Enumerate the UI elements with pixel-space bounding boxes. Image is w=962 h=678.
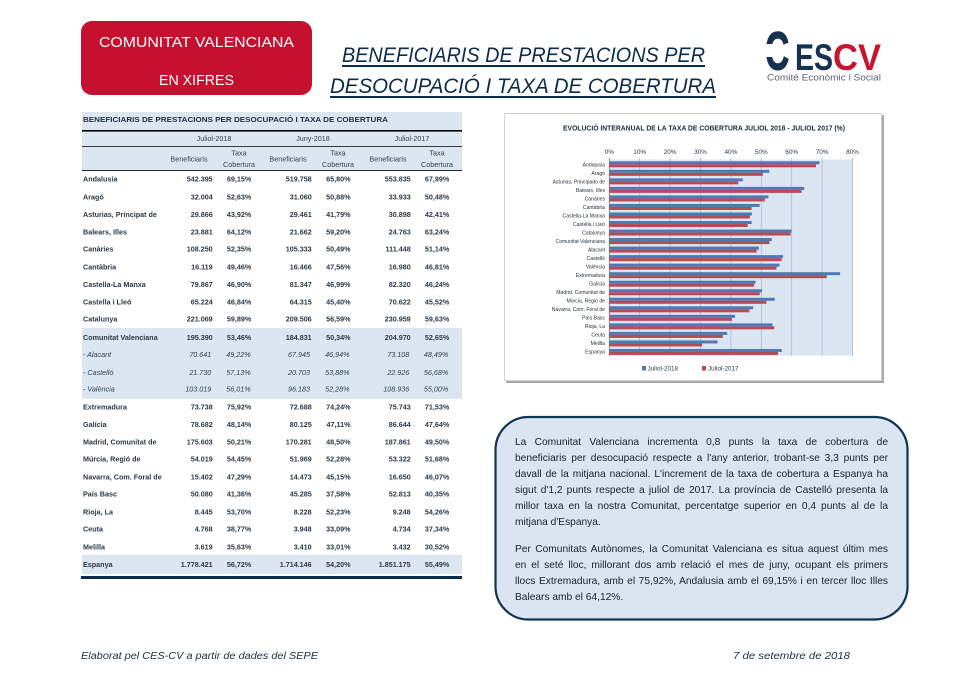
table rows: 170.281 bbox=[286, 438, 312, 447]
table rows: 1.851.175 bbox=[379, 560, 411, 569]
callout text bbox=[515, 436, 888, 602]
category labels: Melilla bbox=[591, 341, 605, 347]
table rows: 53,46% bbox=[227, 333, 252, 342]
callout text: davall de la mitjana nacional. L'increment de la taxa de cobertura a Espanya ha bbox=[515, 468, 888, 480]
x axis labels: 60% bbox=[785, 149, 798, 156]
category labels: Cantàbria bbox=[583, 205, 605, 211]
table rows: 46,99% bbox=[326, 280, 351, 289]
table rows: 48,14% bbox=[227, 420, 252, 429]
table rows: 46,94% bbox=[325, 350, 350, 359]
callout text: La Comunitat Valenciana incrementa 0,8 punts la taxa de cobertura de bbox=[515, 436, 888, 448]
category labels: Madrid, Comunitat de bbox=[556, 290, 605, 296]
table rows: 53,70% bbox=[227, 508, 252, 517]
category labels: Aragó bbox=[591, 171, 605, 177]
table column headers bbox=[82, 130, 462, 171]
table rows: 56,01% bbox=[226, 385, 251, 394]
table rows: Melilla bbox=[83, 543, 106, 552]
category labels: Castella i Lleó bbox=[573, 222, 605, 228]
table title band: BENEFICIARIS DE PRESTACIONS PER DESOCUPACIÓ I TAXA DE COBERTURA bbox=[83, 115, 389, 124]
category labels: Extremadura bbox=[576, 273, 605, 279]
table rows: 50,48% bbox=[425, 193, 450, 202]
chart legend bbox=[642, 366, 739, 372]
table rows: 45,52% bbox=[425, 298, 450, 307]
table rows: 33.933 bbox=[389, 193, 411, 202]
table rows: Castella-La Manxa bbox=[83, 280, 147, 289]
table rows: 46,07% bbox=[425, 473, 450, 482]
callout text: beneficiaris per desocupació respecte a l'any anterior, trobant-se 3,3 punts per bbox=[515, 452, 888, 464]
table rows: 49,46% bbox=[227, 263, 252, 272]
table column headers: Beneficiaris bbox=[369, 154, 407, 164]
table rows: Múrcia, Regió de bbox=[83, 455, 141, 464]
table rows: 71,53% bbox=[425, 403, 450, 412]
table rows: 55,00% bbox=[424, 385, 449, 394]
category labels: València bbox=[586, 264, 605, 270]
plot background bbox=[609, 160, 853, 356]
table rows: 46,84% bbox=[227, 298, 252, 307]
table rows: 56,59% bbox=[326, 315, 351, 324]
category labels: Rioja, La bbox=[585, 324, 605, 330]
table rows: 4.734 bbox=[393, 525, 411, 534]
table rows: 57,13% bbox=[226, 368, 251, 377]
table rows: 59,20% bbox=[326, 228, 351, 237]
table column headers: Juliol-2017 bbox=[395, 134, 429, 143]
table rows: 209.506 bbox=[286, 315, 312, 324]
table rows: 50,34% bbox=[326, 333, 351, 342]
table rows: - València bbox=[83, 385, 115, 394]
table rows: 54,26% bbox=[425, 508, 450, 517]
table rows: Castella i Lleó bbox=[83, 298, 132, 307]
bars: Juliol-2018 bbox=[609, 161, 840, 352]
table column headers: Taxa bbox=[231, 148, 247, 158]
table rows: Rioja, La bbox=[83, 508, 114, 517]
table rows: 41,79% bbox=[326, 210, 351, 219]
table rows: 3.410 bbox=[294, 543, 312, 552]
table rows: 67.945 bbox=[288, 350, 311, 359]
table rows: 52,35% bbox=[227, 245, 252, 254]
table column headers: Cobertura bbox=[223, 160, 255, 169]
table rows: Catalunya bbox=[83, 315, 118, 324]
table rows: Galícia bbox=[83, 420, 108, 429]
table rows: 175.603 bbox=[187, 438, 213, 447]
table rows: 51,14% bbox=[425, 245, 450, 254]
title: BENEFICIARIS DE PRESTACIONS PER bbox=[342, 44, 705, 67]
table rows: 45,15% bbox=[326, 473, 351, 482]
table rows: Extremadura bbox=[83, 403, 128, 412]
badge: Comunitat Valenciana en xifres: COMUNITAT VALENCIANA bbox=[99, 35, 294, 51]
category labels: Asturias, Principado de bbox=[553, 180, 605, 186]
table rows: Espanya bbox=[83, 560, 114, 569]
chart: evolució interanual de la taxa de cobertura bbox=[504, 114, 884, 383]
table rows: 78.682 bbox=[191, 420, 213, 429]
table rows: Ceuta bbox=[83, 525, 104, 534]
x axis labels: 20% bbox=[664, 149, 677, 156]
table rows: Asturias, Principat de bbox=[83, 210, 157, 219]
title bbox=[330, 44, 716, 98]
table rows: 70.641 bbox=[189, 350, 211, 359]
table rows bbox=[83, 175, 450, 569]
callout text: en el seté lloc, millorant dos amb relació el mes de juny, ocupant els primers bbox=[515, 560, 888, 570]
table rows: 47,64% bbox=[425, 420, 450, 429]
table rows: 79.867 bbox=[191, 280, 213, 289]
table rows: 86.644 bbox=[389, 420, 411, 429]
table rows: 111.448 bbox=[386, 245, 411, 254]
table: beneficiaris i taxa de cobertura bbox=[81, 112, 462, 579]
x axis labels bbox=[605, 149, 859, 156]
x axis labels: 50% bbox=[755, 149, 768, 156]
table rows: 73.108 bbox=[387, 350, 409, 359]
table title band bbox=[82, 112, 462, 130]
table rows: 65,80% bbox=[326, 175, 351, 184]
category labels bbox=[552, 162, 606, 356]
table rows: 3.619 bbox=[195, 543, 213, 552]
table rows: 33,09% bbox=[326, 525, 351, 534]
table rows: 45,40% bbox=[326, 298, 351, 307]
table rows: 52,28% bbox=[326, 455, 351, 464]
table rows: 14.473 bbox=[290, 473, 312, 482]
category labels: Galícia bbox=[589, 282, 605, 288]
table rows: 47,11% bbox=[327, 420, 351, 429]
category labels: Espanya bbox=[585, 350, 605, 356]
highlight band: Comunitat Valenciana bbox=[82, 328, 462, 399]
table rows: 35,63% bbox=[227, 543, 252, 552]
table column headers: Beneficiaris bbox=[170, 154, 208, 164]
table rows: 74,24% bbox=[326, 403, 351, 412]
category labels: País Basc bbox=[582, 316, 605, 322]
category labels: Alacant bbox=[588, 248, 606, 254]
table rows: 37,34% bbox=[425, 525, 450, 534]
logo: CES-CV: CV bbox=[833, 37, 881, 78]
table rows: 48,50% bbox=[326, 438, 351, 447]
table rows: 187.861 bbox=[385, 438, 411, 447]
bars: Juliol-2017 bbox=[609, 164, 827, 355]
x axis labels: 30% bbox=[694, 149, 707, 156]
table rows: 195.390 bbox=[187, 333, 213, 342]
table rows: 52,23% bbox=[326, 508, 351, 517]
table rows: 51.969 bbox=[290, 455, 312, 464]
table rows: Comunitat Valenciana bbox=[83, 333, 159, 342]
table rows: 3.948 bbox=[294, 525, 312, 534]
table rows: 80.125 bbox=[290, 420, 312, 429]
table rows: 52.813 bbox=[389, 490, 411, 499]
table rows: 23.881 bbox=[191, 228, 213, 237]
table column headers: Juliol-2018 bbox=[197, 134, 231, 143]
table rows: 103.019 bbox=[185, 385, 211, 394]
table rows: 16.119 bbox=[191, 263, 213, 272]
footer: date: 7 de setembre de 2018 bbox=[733, 651, 850, 662]
table rows: Madrid, Comunitat de bbox=[83, 438, 156, 447]
callout text: llocs Extremadura, amb el 75,92%, Andalusia amb el 69,15% i en tercer lloc Illes bbox=[515, 576, 888, 586]
table rows: 64,12% bbox=[227, 228, 252, 237]
category labels: Castelló bbox=[587, 256, 605, 262]
table rows: 105.333 bbox=[286, 245, 312, 254]
table rows: 73.738 bbox=[191, 403, 213, 412]
table rows: 22.926 bbox=[386, 368, 409, 377]
table rows: 52,65% bbox=[425, 333, 450, 342]
table rows: 1.778.421 bbox=[181, 560, 213, 569]
table rows: Balears, Illes bbox=[83, 228, 127, 237]
table rows: Andalusia bbox=[83, 175, 118, 184]
chart legend: Juliol-2018 bbox=[648, 366, 678, 372]
table rows: 69,15% bbox=[227, 175, 252, 184]
table rows: 30,52% bbox=[425, 543, 450, 552]
title: DESOCUPACIÓ I TAXA DE COBERTURA bbox=[330, 75, 716, 98]
footer: source: Elaborat pel CES-CV a partir de dades del SEPE bbox=[81, 651, 319, 662]
table column headers: Taxa bbox=[429, 148, 445, 158]
table rows: 16.466 bbox=[290, 263, 312, 272]
table rows: 4.768 bbox=[195, 525, 213, 534]
table rows: 20.703 bbox=[287, 368, 310, 377]
table rows: 204.970 bbox=[385, 333, 411, 342]
table rows: 542.395 bbox=[187, 175, 213, 184]
table rows: 1.714.146 bbox=[280, 560, 312, 569]
table rows: 184.831 bbox=[286, 333, 312, 342]
table rows: Aragó bbox=[83, 193, 104, 202]
table rows: 53,88% bbox=[325, 368, 350, 377]
x axis labels: 10% bbox=[633, 149, 646, 156]
table column headers: Juny-2018 bbox=[296, 134, 330, 143]
callout text: Per Comunitats Autònomes, la Comunitat Valenciana es situa aquest últim mes bbox=[515, 544, 888, 554]
table rows: 46,81% bbox=[425, 263, 450, 272]
x axis labels: 70% bbox=[816, 149, 829, 156]
table rows: País Basc bbox=[83, 490, 117, 499]
table rows: 65.224 bbox=[191, 298, 213, 307]
x axis labels: 40% bbox=[725, 149, 738, 156]
table rows: 51,68% bbox=[425, 455, 450, 464]
table rows: 221.069 bbox=[187, 315, 213, 324]
table rows: 33,01% bbox=[326, 543, 351, 552]
callout text: sigut d'1,2 punts respecte a juliol de 2017. La província de Castelló presenta la bbox=[515, 484, 888, 496]
table rows: 54,45% bbox=[227, 455, 252, 464]
table rows: 41,36% bbox=[227, 490, 252, 499]
table rows: 49,50% bbox=[425, 438, 450, 447]
table column headers: Taxa bbox=[330, 148, 346, 158]
table rows: 64.315 bbox=[290, 298, 312, 307]
table rows: 108.250 bbox=[187, 245, 213, 254]
table rows: 50,88% bbox=[326, 193, 351, 202]
chart legend: Juliol-2017 bbox=[708, 366, 739, 372]
table rows: 43,92% bbox=[227, 210, 252, 219]
table rows: Cantàbria bbox=[83, 263, 117, 272]
table column headers: Cobertura bbox=[421, 160, 453, 169]
table rows: 96.183 bbox=[288, 385, 310, 394]
table rows: 52,63% bbox=[227, 193, 252, 202]
x axis labels: 80% bbox=[846, 149, 859, 156]
table rows: 59,89% bbox=[227, 315, 252, 324]
category labels: Múrcia, Regió de bbox=[566, 298, 605, 304]
table rows: 24.763 bbox=[389, 228, 411, 237]
table rows: 29.461 bbox=[290, 210, 312, 219]
category labels: Castella-La Manxa bbox=[563, 214, 605, 220]
table rows: 32.004 bbox=[191, 193, 213, 202]
table rows: 56,72% bbox=[227, 560, 252, 569]
table rows: 47,29% bbox=[227, 473, 252, 482]
table rows: 75.743 bbox=[389, 403, 411, 412]
table rows: 108.936 bbox=[383, 385, 409, 394]
table rows: 56,68% bbox=[424, 368, 449, 377]
logo: CES-CV: Comité Econòmic i Social bbox=[767, 72, 881, 82]
table bottom rule bbox=[81, 576, 462, 579]
table rows: 46,90% bbox=[227, 280, 252, 289]
table rows: 53.322 bbox=[389, 455, 411, 464]
table rows: 72.688 bbox=[290, 403, 312, 412]
table rows: - Castelló bbox=[83, 368, 113, 377]
table rows: 45.285 bbox=[290, 490, 312, 499]
table column headers: Beneficiaris bbox=[269, 154, 307, 164]
table rows: 75,92% bbox=[227, 403, 252, 412]
table rows: 59,63% bbox=[425, 315, 450, 324]
table rows: 8.228 bbox=[294, 508, 312, 517]
category labels: Balears, Illes bbox=[576, 188, 605, 194]
table rows: 48,49% bbox=[424, 350, 449, 359]
table rows: 3.432 bbox=[393, 543, 411, 552]
table rows: 42,41% bbox=[425, 210, 450, 219]
callout panel background bbox=[496, 417, 908, 620]
callout text: millor taxa en la nostra Comunitat, percentatge superior en 0,4 punts al de la bbox=[515, 500, 888, 512]
logo: CES-CV: ES bbox=[795, 37, 833, 78]
badge: Comunitat Valenciana en xifres bbox=[81, 21, 312, 95]
logo: CES-CV bbox=[764, 20, 881, 82]
table rows: 47,56% bbox=[326, 263, 351, 272]
table rows: 54.019 bbox=[191, 455, 213, 464]
table rows: Canàries bbox=[83, 245, 113, 254]
table rows: 70.622 bbox=[389, 298, 411, 307]
table rows: 21.662 bbox=[290, 228, 312, 237]
category labels: Canàries bbox=[585, 196, 605, 202]
category labels: Catalunya bbox=[582, 230, 605, 236]
table rows: 52,28% bbox=[325, 385, 350, 394]
category labels: Comunitat Valenciana bbox=[556, 239, 605, 245]
table rows: 37,58% bbox=[326, 490, 351, 499]
table rows: 30.898 bbox=[389, 210, 411, 219]
callout text: mitjana d'Espanya. bbox=[515, 516, 601, 528]
chart title: EVOLUCIÓ INTERANUAL DE LA TAXA DE COBERTURA JULIOL 2018 - JULIOL 2017 (%) bbox=[563, 124, 845, 132]
table rows: 55,49% bbox=[425, 560, 450, 569]
x axis labels: 0% bbox=[605, 149, 614, 156]
table rows: 9.248 bbox=[393, 508, 411, 517]
table rows: - Alacant bbox=[83, 350, 112, 359]
callout text: Balears amb el 64,12%. bbox=[515, 592, 623, 602]
table rows: 50,49% bbox=[326, 245, 351, 254]
table rows: 50.080 bbox=[191, 490, 213, 499]
table rows: 38,77% bbox=[227, 525, 252, 534]
table column headers: Cobertura bbox=[322, 160, 354, 169]
table rows: 49,22% bbox=[226, 350, 251, 359]
table rows: 50,21% bbox=[227, 438, 252, 447]
table rows: 40,35% bbox=[425, 490, 450, 499]
highlight band: Espanya bbox=[82, 555, 462, 574]
category labels: Andalusia bbox=[583, 162, 605, 168]
table rows: 8.445 bbox=[195, 508, 213, 517]
table rows: 54,20% bbox=[326, 560, 351, 569]
table rows: 81.347 bbox=[290, 280, 312, 289]
table rows: 67,99% bbox=[425, 175, 450, 184]
category labels: Ceuta bbox=[591, 332, 605, 338]
table rows: 16.980 bbox=[389, 263, 411, 272]
table rows: 82.320 bbox=[389, 280, 411, 289]
table rows: 46,24% bbox=[425, 280, 450, 289]
table rows: 519.758 bbox=[286, 175, 312, 184]
category labels: Navarra, Com. Foral de bbox=[552, 307, 605, 313]
table rows: 29.866 bbox=[191, 210, 213, 219]
table rows: 21.730 bbox=[188, 368, 211, 377]
chart frame bbox=[504, 114, 884, 383]
table rows: Navarra, Com. Foral de bbox=[83, 473, 162, 482]
table rows: 31.060 bbox=[290, 193, 312, 202]
logo: CES-CV: C bbox=[765, 20, 789, 82]
table rows: 553.835 bbox=[385, 175, 411, 184]
table rows: 16.650 bbox=[389, 473, 411, 482]
badge: Comunitat Valenciana en xifres: EN XIFRES bbox=[159, 73, 234, 89]
table rows: 230.959 bbox=[385, 315, 411, 324]
table rows: 63,24% bbox=[425, 228, 450, 237]
table rows: 15.402 bbox=[191, 473, 213, 482]
